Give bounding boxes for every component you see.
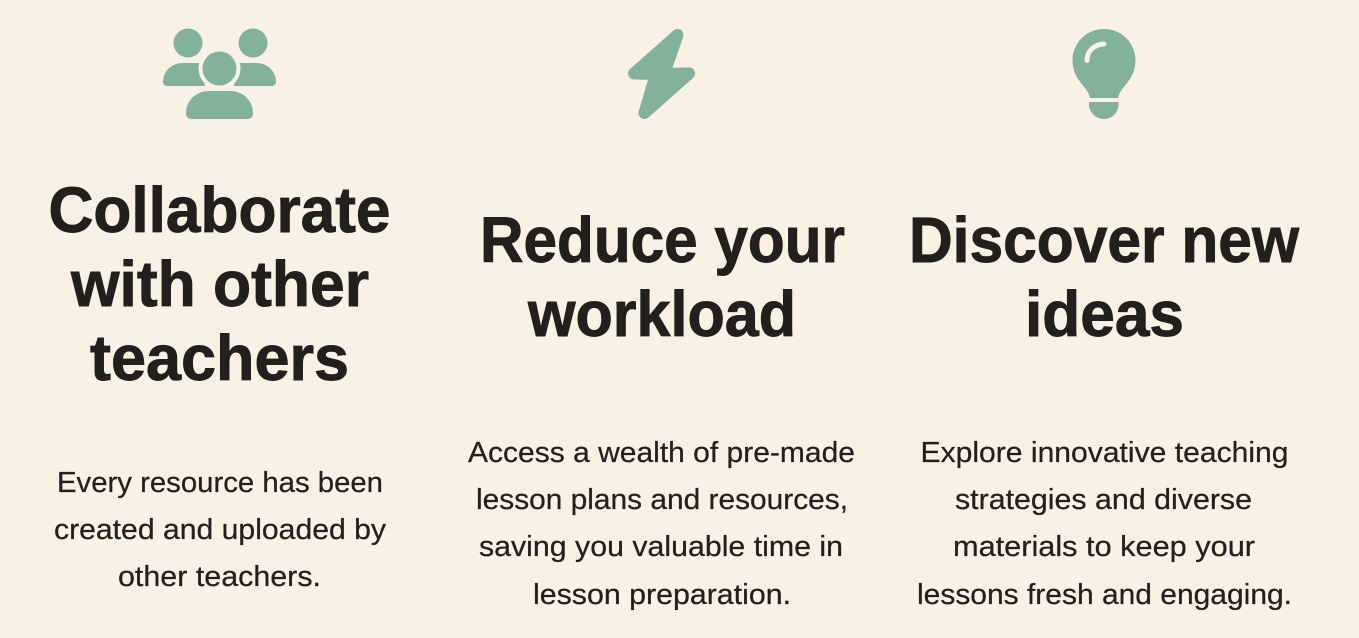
icon: light bulb: [1072, 29, 1136, 119]
text: discover ideas description: strategies and diverse: [955, 484, 1252, 516]
heading: reduce your workload: workload: [527, 278, 796, 350]
heading: discover new ideas: ideas: [1025, 278, 1184, 350]
heading: collaborate with other teachers: with other: [70, 248, 369, 320]
heading: reduce your workload: Reduce your: [480, 204, 845, 276]
text: discover ideas description: materials to keep your: [953, 531, 1255, 563]
icon: group of people: [163, 28, 276, 119]
text: discover ideas description: Explore innovative teaching: [920, 437, 1288, 469]
text: reduce workload description: [468, 437, 855, 611]
text: reduce workload description: saving you valuable time in: [479, 531, 843, 563]
heading: collaborate with other teachers: teachers: [90, 322, 349, 394]
heading: reduce your workload: [480, 204, 845, 350]
panel: reduce workload: [468, 35, 855, 611]
text: reduce workload description: Access a wealth of pre-made: [468, 437, 855, 469]
text: collaborate description: [54, 467, 387, 593]
text: collaborate description: Every resource has been: [57, 467, 383, 499]
heading: collaborate with other teachers: Collaborate: [48, 174, 390, 246]
text: collaborate description: other teachers.: [118, 561, 321, 593]
text: discover ideas description: [917, 437, 1292, 611]
heading: discover new ideas: Discover new: [909, 204, 1299, 276]
text: reduce workload description: lesson plans and resources,: [476, 484, 848, 516]
text: discover ideas description: lessons fresh and engaging.: [917, 579, 1292, 611]
heading: collaborate with other teachers: [48, 174, 390, 394]
heading: discover new ideas: [909, 204, 1299, 350]
text: reduce workload description: lesson preparation.: [533, 579, 791, 611]
icon: lightning bolt: [634, 35, 689, 113]
text: collaborate description: created and uploaded by: [54, 514, 387, 546]
panel: discover ideas: [909, 29, 1299, 611]
panel: collaborate: [48, 28, 390, 593]
